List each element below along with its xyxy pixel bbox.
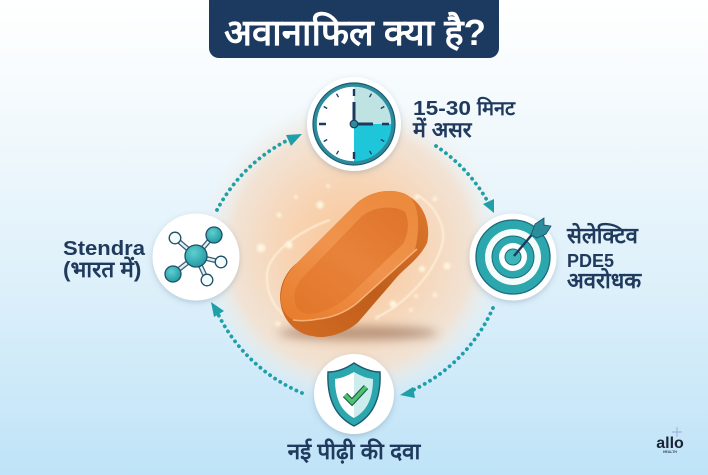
molecule label: (भारत में) bbox=[63, 256, 141, 282]
molecule icon bbox=[152, 214, 240, 300]
pill bbox=[278, 191, 438, 340]
central glow bbox=[197, 95, 507, 405]
title banner: अवानाफिल क्या है? bbox=[224, 11, 486, 53]
title banner bbox=[209, 0, 499, 58]
shield label: नई पीढ़ी की दवा bbox=[287, 438, 422, 464]
arrow: shield to molecule bbox=[211, 302, 302, 393]
pill top face bbox=[281, 191, 418, 320]
clock label: मिनट bbox=[476, 96, 516, 120]
target label: सेलेक्टिव bbox=[566, 222, 639, 248]
target label: अवरोधक bbox=[567, 267, 642, 293]
target label: PDE5 bbox=[567, 251, 614, 271]
target label bbox=[566, 222, 642, 293]
molecule label bbox=[63, 237, 146, 282]
clock label: में असर bbox=[412, 117, 473, 142]
arrow: clock to target bbox=[436, 146, 494, 213]
clock label: 15-30 bbox=[413, 98, 471, 120]
arrow: molecule to clock bbox=[217, 134, 302, 210]
sparkle ring around pill bbox=[257, 184, 450, 326]
logo: allo health: HEALTH bbox=[663, 450, 677, 454]
clock label bbox=[412, 96, 516, 142]
clock icon bbox=[307, 77, 401, 171]
logo: allo health: allo bbox=[656, 435, 684, 452]
logo: allo health bbox=[656, 427, 684, 454]
shield icon bbox=[314, 354, 394, 434]
pill inner face bbox=[294, 207, 408, 314]
target icon bbox=[470, 214, 556, 300]
molecule label: Stendra bbox=[63, 237, 146, 260]
arrow: target to shield bbox=[400, 308, 493, 398]
pill rim highlight bbox=[293, 249, 417, 321]
pill side edge bbox=[280, 191, 428, 337]
